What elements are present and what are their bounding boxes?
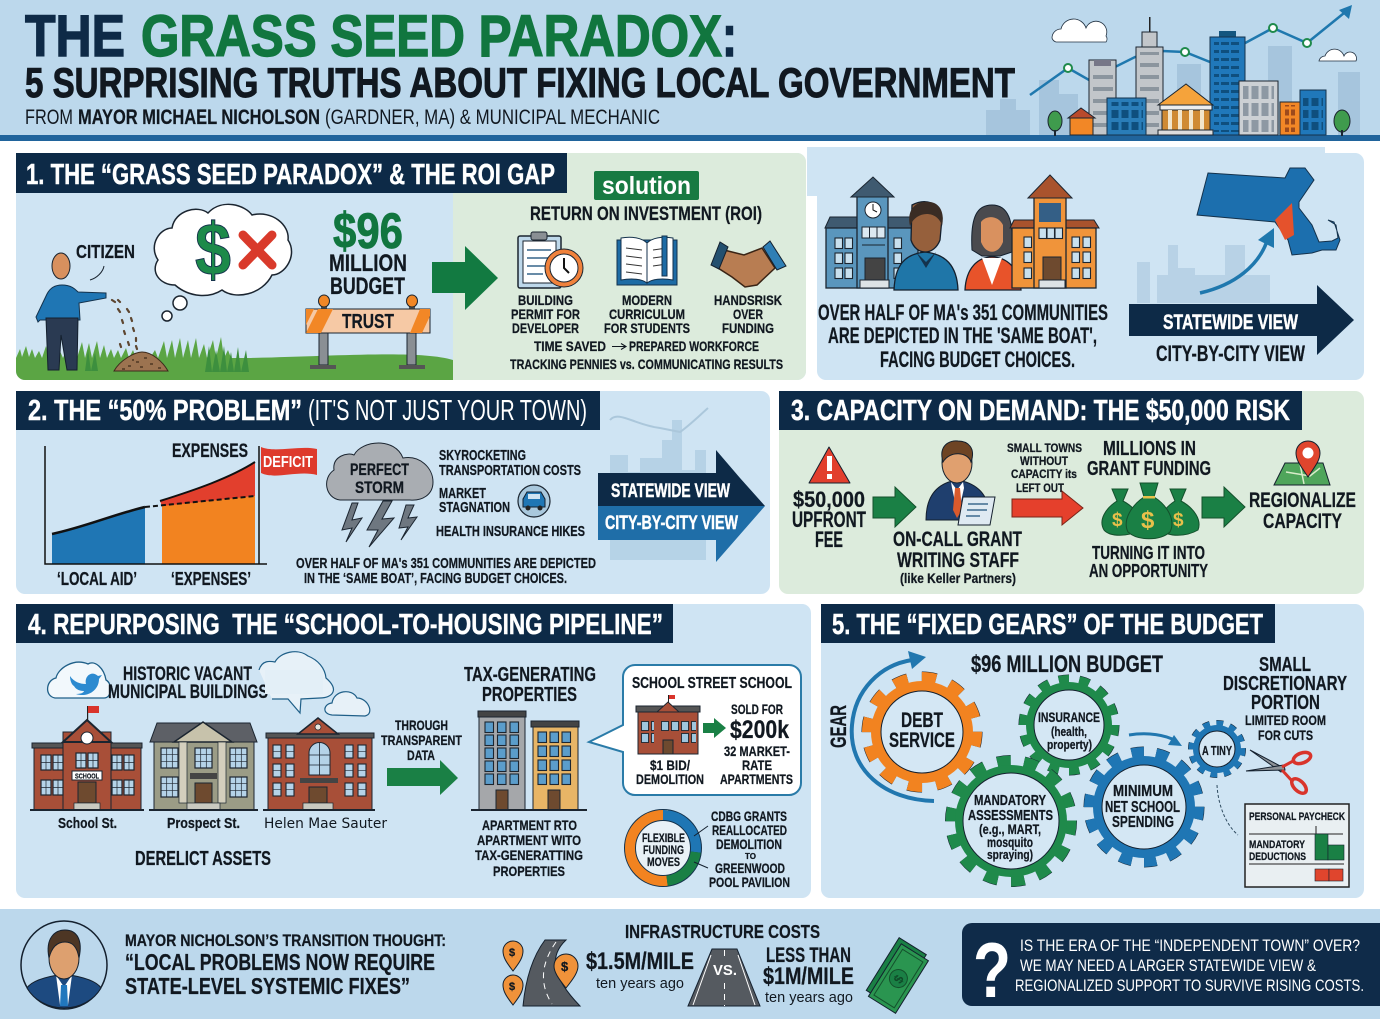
funding moves text: REALLOCATED	[712, 822, 787, 838]
storm causes: SKYROCKETING	[439, 447, 526, 464]
building: school st: SCHOOL	[75, 774, 100, 780]
gear: mandatory assessments: spraying)	[987, 847, 1033, 862]
same boat caption: FACING BUDGET CHOICES.	[880, 347, 1075, 372]
panel 5: fixed gears	[821, 604, 1364, 898]
building: prospect st	[149, 722, 258, 811]
mayor quote: “LOCAL PROBLEMS NOW REQUIRE	[125, 949, 435, 975]
icon: citizen scattering seed	[36, 253, 168, 371]
budget figure: MILLION	[329, 250, 407, 277]
storm causes	[436, 447, 585, 540]
chart: local aid vs expenses	[45, 446, 267, 564]
icon: straight road with vs: VS.	[713, 962, 737, 979]
small towns note	[1007, 441, 1082, 495]
panel 2: 50% problem	[16, 391, 770, 594]
budget figure: $96	[333, 203, 403, 259]
property caption: APARTMENT RTO	[482, 817, 577, 833]
red arrow	[1012, 491, 1083, 525]
ROI heading: RETURN ON INVESTMENT (ROI)	[530, 204, 762, 225]
heading 4: 4. REPURPOSING THE “SCHOOL-TO-HOUSING PIPELINE”	[28, 609, 663, 641]
gear: a tiny: A TINY	[1202, 743, 1232, 758]
chart labels	[57, 441, 251, 589]
regionalize capacity	[1249, 489, 1356, 533]
arrow: statewide and city-by-city view: CITY-BY-CITY VIEW	[605, 513, 738, 534]
gear: minimum net school spending: SPENDING	[1112, 814, 1174, 831]
curved arrow	[1200, 228, 1274, 293]
bottom band	[0, 909, 1380, 1019]
gear: debt service: DEBT	[901, 709, 943, 732]
arrow	[387, 760, 458, 795]
blue arrow to tiny gear	[1129, 734, 1182, 746]
same boat caption: OVER HALF OF MA's 351 COMMUNITIES	[818, 300, 1108, 325]
mayor quote: MAYOR NICHOLSON’S TRANSITION THOUGHT:	[125, 931, 446, 950]
gear: minimum net school spending: MINIMUM	[1113, 783, 1173, 800]
small discretionary portion: FOR CUTS	[1258, 727, 1313, 743]
through transparent data: THROUGH	[395, 717, 448, 733]
arrow: statewide and city-by-city view	[598, 450, 765, 562]
icon: thought bubble with dollar and x	[154, 204, 292, 321]
gear: mandatory assessments	[951, 761, 1071, 881]
flag: deficit	[261, 447, 317, 476]
paycheck box	[1245, 804, 1349, 887]
building: helen mae sauter	[263, 718, 375, 811]
arrow	[703, 718, 726, 738]
icon: trust barricade: TRUST	[342, 311, 394, 333]
millions in grant funding	[1087, 438, 1211, 480]
gear: insurance: INSURANCE	[1038, 709, 1100, 725]
storm causes: TRANSPORTATION COSTS	[439, 462, 581, 479]
derelict assets: DERELICT ASSETS	[135, 848, 271, 870]
cost ten years ago: $1.5M/MILE	[586, 948, 694, 975]
small discretionary portion: PORTION	[1251, 692, 1320, 714]
icon: open book	[617, 236, 677, 285]
same boat caption	[818, 300, 1108, 372]
paycheck box: MANDATORY	[1249, 839, 1306, 851]
chart: flexible funding moves donut: MOVES	[647, 855, 680, 869]
gear: insurance: property)	[1047, 737, 1092, 752]
byline: FROM	[25, 106, 73, 129]
icon: warning	[809, 447, 850, 483]
building: school st	[30, 706, 144, 811]
upfront fee: FEE	[815, 527, 843, 552]
gear: mandatory assessments: (e.g., MART,	[979, 821, 1041, 837]
icon: money bags	[1102, 483, 1199, 539]
cost ten years ago	[586, 948, 694, 992]
small towns note: LEFT OUT	[1016, 481, 1065, 495]
less than cost: LESS THAN	[766, 944, 851, 967]
turning into opportunity: AN OPPORTUNITY	[1089, 561, 1208, 581]
heading 5	[821, 604, 1275, 643]
callout: school street school: RATE	[742, 757, 772, 773]
mayor quote	[125, 931, 446, 999]
arrow	[1202, 487, 1245, 527]
infrastructure costs heading: INFRASTRUCTURE COSTS	[625, 922, 820, 942]
small towns note: SMALL TOWNS	[1007, 441, 1082, 455]
icon: scissors	[1246, 750, 1312, 796]
icon: money bags: $	[1173, 510, 1184, 531]
property caption: TAX-GENERATTING	[475, 847, 583, 863]
cost ten years ago: ten years ago	[596, 975, 684, 992]
icon: twitter cloud	[48, 662, 111, 698]
label: citizen: CITIZEN	[76, 242, 135, 262]
label: city-by-city view: CITY-BY-CITY VIEW	[1156, 341, 1305, 366]
icon: winding road with pins: $	[509, 981, 515, 993]
arrow: statewide view	[1129, 285, 1354, 355]
arrow: statewide and city-by-city view: STATEWIDE VIEW	[611, 481, 730, 502]
solution examples: PERMIT FOR	[511, 306, 580, 322]
callout: school street school: DEMOLITION	[636, 771, 704, 787]
heading 2	[16, 391, 600, 430]
title: the grass seed paradox: :	[722, 4, 737, 69]
funding moves text: CDBG GRANTS	[711, 808, 787, 824]
small towns note: WITHOUT	[1020, 454, 1069, 468]
solution examples: DEVELOPER	[512, 320, 579, 336]
icon: grant writer	[926, 441, 995, 525]
title: the grass seed paradox: GRASS SEED PARADOX	[141, 4, 722, 69]
chart: flexible funding moves donut: FLEXIBLE	[642, 831, 685, 845]
same boat caption	[296, 555, 596, 587]
funding moves text	[694, 808, 790, 890]
solution examples: MODERN	[622, 292, 672, 308]
arrow to solution	[432, 246, 498, 310]
funding moves text: TO	[745, 852, 756, 861]
icon: trust barricade	[306, 295, 430, 369]
icon: perfect storm cloud: STORM	[355, 478, 404, 497]
skyline illustration with rising line chart	[986, 5, 1360, 136]
icon: winding road with pins	[503, 940, 580, 1006]
icon: handshake	[711, 241, 786, 287]
icon: woman	[965, 205, 1021, 290]
regionalize capacity: CAPACITY	[1263, 510, 1342, 533]
small discretionary portion: LIMITED ROOM	[1245, 712, 1326, 728]
callout: school street school: $1 BID/	[650, 757, 690, 773]
panel: same boat statewide view	[807, 147, 1364, 380]
less than cost	[763, 944, 854, 1006]
building labels	[58, 815, 387, 832]
curved arrow around gear	[852, 651, 934, 801]
small towns note: CAPACITY its	[1011, 467, 1077, 481]
upfront fee: $50,000	[793, 487, 865, 512]
heading 2: 2. THE “50% PROBLEM”	[28, 395, 302, 427]
funding moves text: DEMOLITION	[716, 836, 782, 852]
tax-generating heading	[464, 664, 596, 706]
icon: map pin	[1274, 441, 1330, 485]
solution examples: CURRICULUM	[609, 306, 685, 322]
gear: a tiny	[1191, 723, 1243, 775]
gear: minimum net school spending	[1089, 752, 1199, 862]
through transparent data: TRANSPARENT	[381, 732, 462, 748]
heading 4	[16, 604, 673, 643]
icon: massachusetts map	[1197, 168, 1340, 255]
gear label: GEAR	[826, 705, 851, 748]
building labels: Prospect St.	[167, 815, 240, 832]
building labels: School St.	[58, 815, 117, 832]
solution examples: FUNDING	[722, 320, 774, 336]
solution examples: HANDSRISK	[714, 292, 782, 308]
callout: school street school: SOLD FOR	[731, 701, 783, 717]
faded city chart	[610, 408, 708, 560]
chart labels: ‘EXPENSES’	[171, 569, 251, 589]
historic vacant municipal buildings: HISTORIC VACANT	[123, 664, 252, 685]
icon: blue town hall	[825, 177, 919, 288]
panel 3: capacity on demand	[779, 391, 1364, 594]
flag: deficit: DEFICIT	[263, 454, 313, 471]
faded city	[1137, 245, 1270, 303]
icon: clipboard and clock	[518, 232, 583, 288]
icon: winding road with pins: $	[509, 947, 515, 959]
icon: mayor portrait	[21, 921, 107, 1009]
gear: debt service	[867, 677, 977, 787]
icon: money bags: $	[1141, 507, 1155, 534]
funding moves text: GREENWOOD	[715, 860, 785, 876]
solution examples: FOR STUDENTS	[604, 320, 690, 336]
historic vacant municipal buildings	[108, 664, 268, 703]
callout: school street school: $200k	[730, 716, 789, 744]
subtitle: 5 SURPRISING TRUTHS ABOUT FIXING LOCAL GOVERNMENT	[25, 59, 1015, 106]
solution badge: solution	[602, 172, 691, 200]
same boat caption: ARE DEPICTED IN THE 'SAME BOAT',	[828, 323, 1097, 348]
chart labels: ‘LOCAL AID’	[57, 569, 137, 589]
title: the grass seed paradox: THE	[25, 4, 125, 69]
turning into opportunity	[1089, 543, 1208, 581]
gear: minimum net school spending: NET SCHOOL	[1105, 799, 1180, 816]
upfront fee: UPFRONT	[792, 507, 866, 532]
callout: school street school: 32 MARKET-	[724, 743, 790, 759]
independent town callout: ?	[973, 926, 1011, 1014]
property caption	[475, 817, 583, 879]
building labels: Helen Mae Sauter	[264, 816, 387, 832]
storm causes: MARKET	[439, 485, 486, 502]
storm causes: STAGNATION	[439, 499, 510, 516]
icon: apartment buildings	[471, 711, 587, 811]
chart: flexible funding moves donut: FUNDING	[643, 843, 684, 857]
heading 1	[16, 153, 567, 193]
gear: insurance	[1023, 679, 1115, 771]
independent town callout	[962, 923, 1380, 1014]
on-call grant writing staff: ON-CALL GRANT	[893, 528, 1022, 551]
storm causes: HEALTH INSURANCE HIKES	[436, 523, 585, 540]
small discretionary portion	[1223, 654, 1347, 743]
ground and grass	[16, 337, 453, 380]
upfront fee	[792, 487, 866, 552]
arrow	[873, 487, 916, 527]
callout: school street school: SCHOOL STREET SCHOOL	[632, 675, 792, 692]
same boat caption: OVER HALF OF MA's 351 COMMUNITIES ARE DEPICTED	[296, 555, 596, 572]
same boat caption: IN THE ‘SAME BOAT’, FACING BUDGET CHOICES.	[304, 570, 567, 587]
budget figure	[329, 203, 407, 300]
less than cost: ten years ago	[765, 989, 853, 1006]
time saved line: TIME SAVED	[534, 338, 606, 354]
icon: straight road with vs	[688, 949, 760, 1006]
dashed arrow	[1217, 785, 1238, 835]
icon: car	[518, 485, 550, 517]
callout: school street school	[589, 665, 801, 795]
icon: money bags: $	[1112, 510, 1123, 531]
arrow: statewide view: STATEWIDE VIEW	[1163, 311, 1298, 334]
millions in grant funding: GRANT FUNDING	[1087, 458, 1211, 480]
tax-generating heading: PROPERTIES	[482, 684, 577, 706]
less than cost: $1M/MILE	[763, 963, 854, 990]
gear: mandatory assessments: ASSESSMENTS	[968, 807, 1053, 824]
time saved line: PREPARED WORKFORCE	[629, 338, 759, 354]
speech clouds	[259, 652, 370, 716]
millions in grant funding: MILLIONS IN	[1103, 438, 1196, 460]
budget figure: BUDGET	[330, 273, 405, 300]
solution examples: BUILDING	[518, 292, 573, 308]
solution examples	[511, 292, 782, 336]
property caption: APARTMENT WITO	[477, 832, 581, 848]
funding moves text: POOL PAVILION	[709, 874, 790, 890]
gear: debt service: SERVICE	[889, 729, 955, 752]
icon: cash	[864, 938, 931, 1013]
paycheck box: DEDUCTIONS	[1249, 851, 1306, 863]
on-call grant writing staff: (like Keller Partners)	[900, 570, 1016, 586]
byline: (GARDNER, MA) & MUNICIPAL MECHANIC	[325, 106, 660, 129]
byline	[25, 106, 660, 129]
icon: perfect storm cloud: PERFECT	[350, 460, 409, 479]
budget heading: $96 MILLION BUDGET	[971, 651, 1163, 678]
chart labels: EXPENSES	[172, 441, 248, 462]
chart: flexible funding moves donut	[630, 815, 696, 881]
icon: perfect storm cloud	[327, 443, 433, 547]
icon: cash: $	[890, 971, 907, 986]
mayor quote: STATE-LEVEL SYSTEMIC FIXES”	[125, 973, 410, 999]
on-call grant writing staff	[893, 528, 1022, 586]
icon: thought bubble with dollar and x: $	[195, 208, 231, 291]
historic vacant municipal buildings: MUNICIPAL BUILDINGS	[108, 682, 268, 703]
icon: winding road with pins: $	[561, 959, 569, 974]
small discretionary portion: SMALL	[1259, 654, 1311, 676]
gear: mandatory assessments: mosquito	[987, 834, 1033, 850]
gear: insurance: (health,	[1051, 724, 1087, 739]
panel 1: grass seed paradox and ROI gap	[16, 153, 806, 380]
callout: school street school: APARTMENTS	[720, 771, 793, 787]
tracking pennies line: TRACKING PENNIES vs. COMMUNICATING RESULTS	[510, 356, 783, 372]
time saved line	[534, 338, 759, 354]
on-call grant writing staff: WRITING STAFF	[897, 549, 1019, 572]
header band	[0, 0, 1380, 141]
heading 1: 1. THE “GRASS SEED PARADOX” & THE ROI GAP	[26, 159, 555, 191]
icon: mini school	[636, 695, 700, 754]
paycheck box: PERSONAL PAYCHECK	[1249, 811, 1345, 823]
icon: man	[894, 202, 958, 290]
property caption: PROPERTIES	[493, 863, 565, 879]
turning into opportunity: TURNING IT INTO	[1092, 543, 1205, 563]
through transparent data: DATA	[407, 747, 435, 763]
panel 4: school-to-housing pipeline	[16, 604, 811, 898]
byline: MAYOR MICHAEL NICHOLSON	[78, 106, 320, 129]
through transparent data	[381, 717, 462, 763]
icon: orange town hall	[1010, 175, 1099, 288]
tax-generating heading: TAX-GENERATING	[464, 664, 596, 686]
solution examples: OVER	[733, 306, 763, 322]
heading 2: (IT'S NOT JUST YOUR TOWN)	[308, 395, 587, 427]
gear: mandatory assessments: MANDATORY	[974, 792, 1046, 809]
